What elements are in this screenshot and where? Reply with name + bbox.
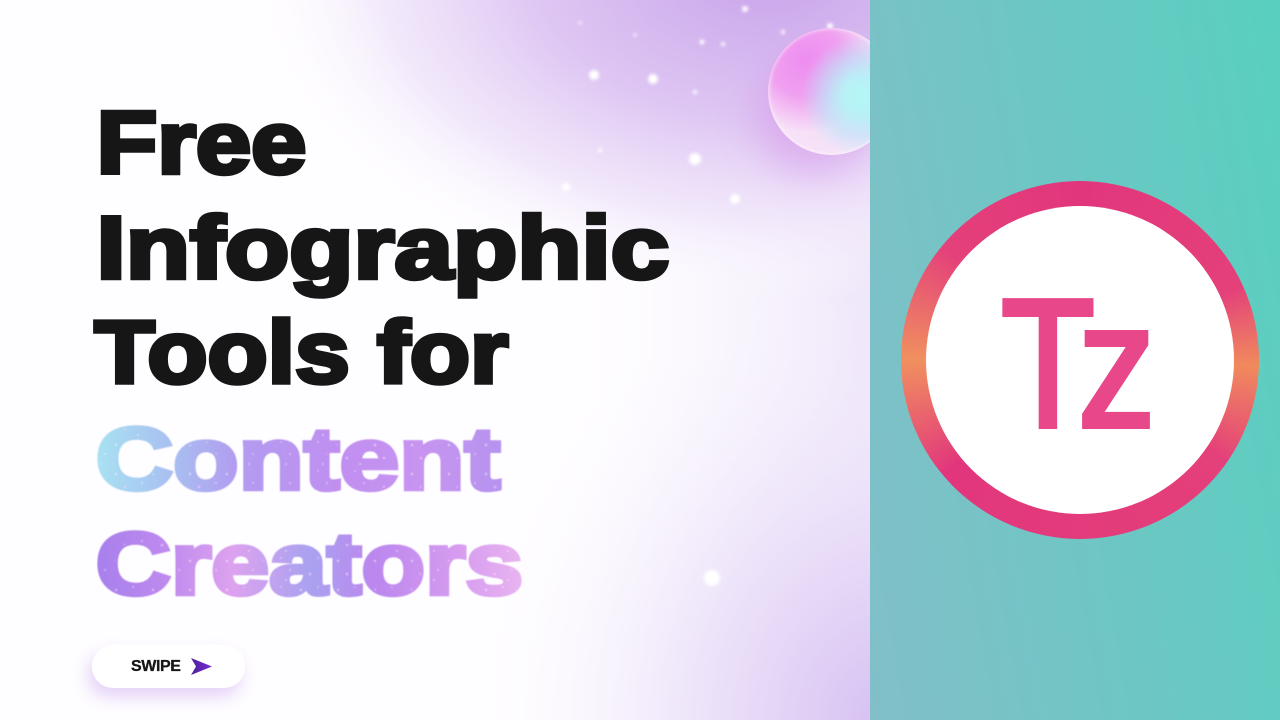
background glow and stars <box>334 0 870 720</box>
panel: left purple poster <box>0 0 870 720</box>
button: swipe <box>92 645 245 688</box>
heading line: Tools for: Tools for <box>94 302 508 402</box>
logo letters: z <box>1078 266 1155 465</box>
logo letters <box>1001 261 1155 465</box>
gradient line: Content: Content <box>96 410 500 508</box>
heading: Content Creators gradient <box>96 410 523 610</box>
logo inner circle <box>926 206 1234 514</box>
icon: arrow <box>191 658 212 675</box>
button label: SWIPE <box>131 658 181 675</box>
icon: glossy orb <box>768 28 895 155</box>
logo: Tz badge <box>901 181 1259 539</box>
heading line: Free: Free <box>97 93 306 192</box>
heading line: Infographic: Infographic <box>96 198 669 297</box>
heading: Free Infographic Tools for <box>93 93 670 402</box>
panel: right teal <box>870 0 1280 720</box>
gradient line: Content: Content <box>96 410 500 508</box>
logo letters: T <box>1001 261 1095 465</box>
